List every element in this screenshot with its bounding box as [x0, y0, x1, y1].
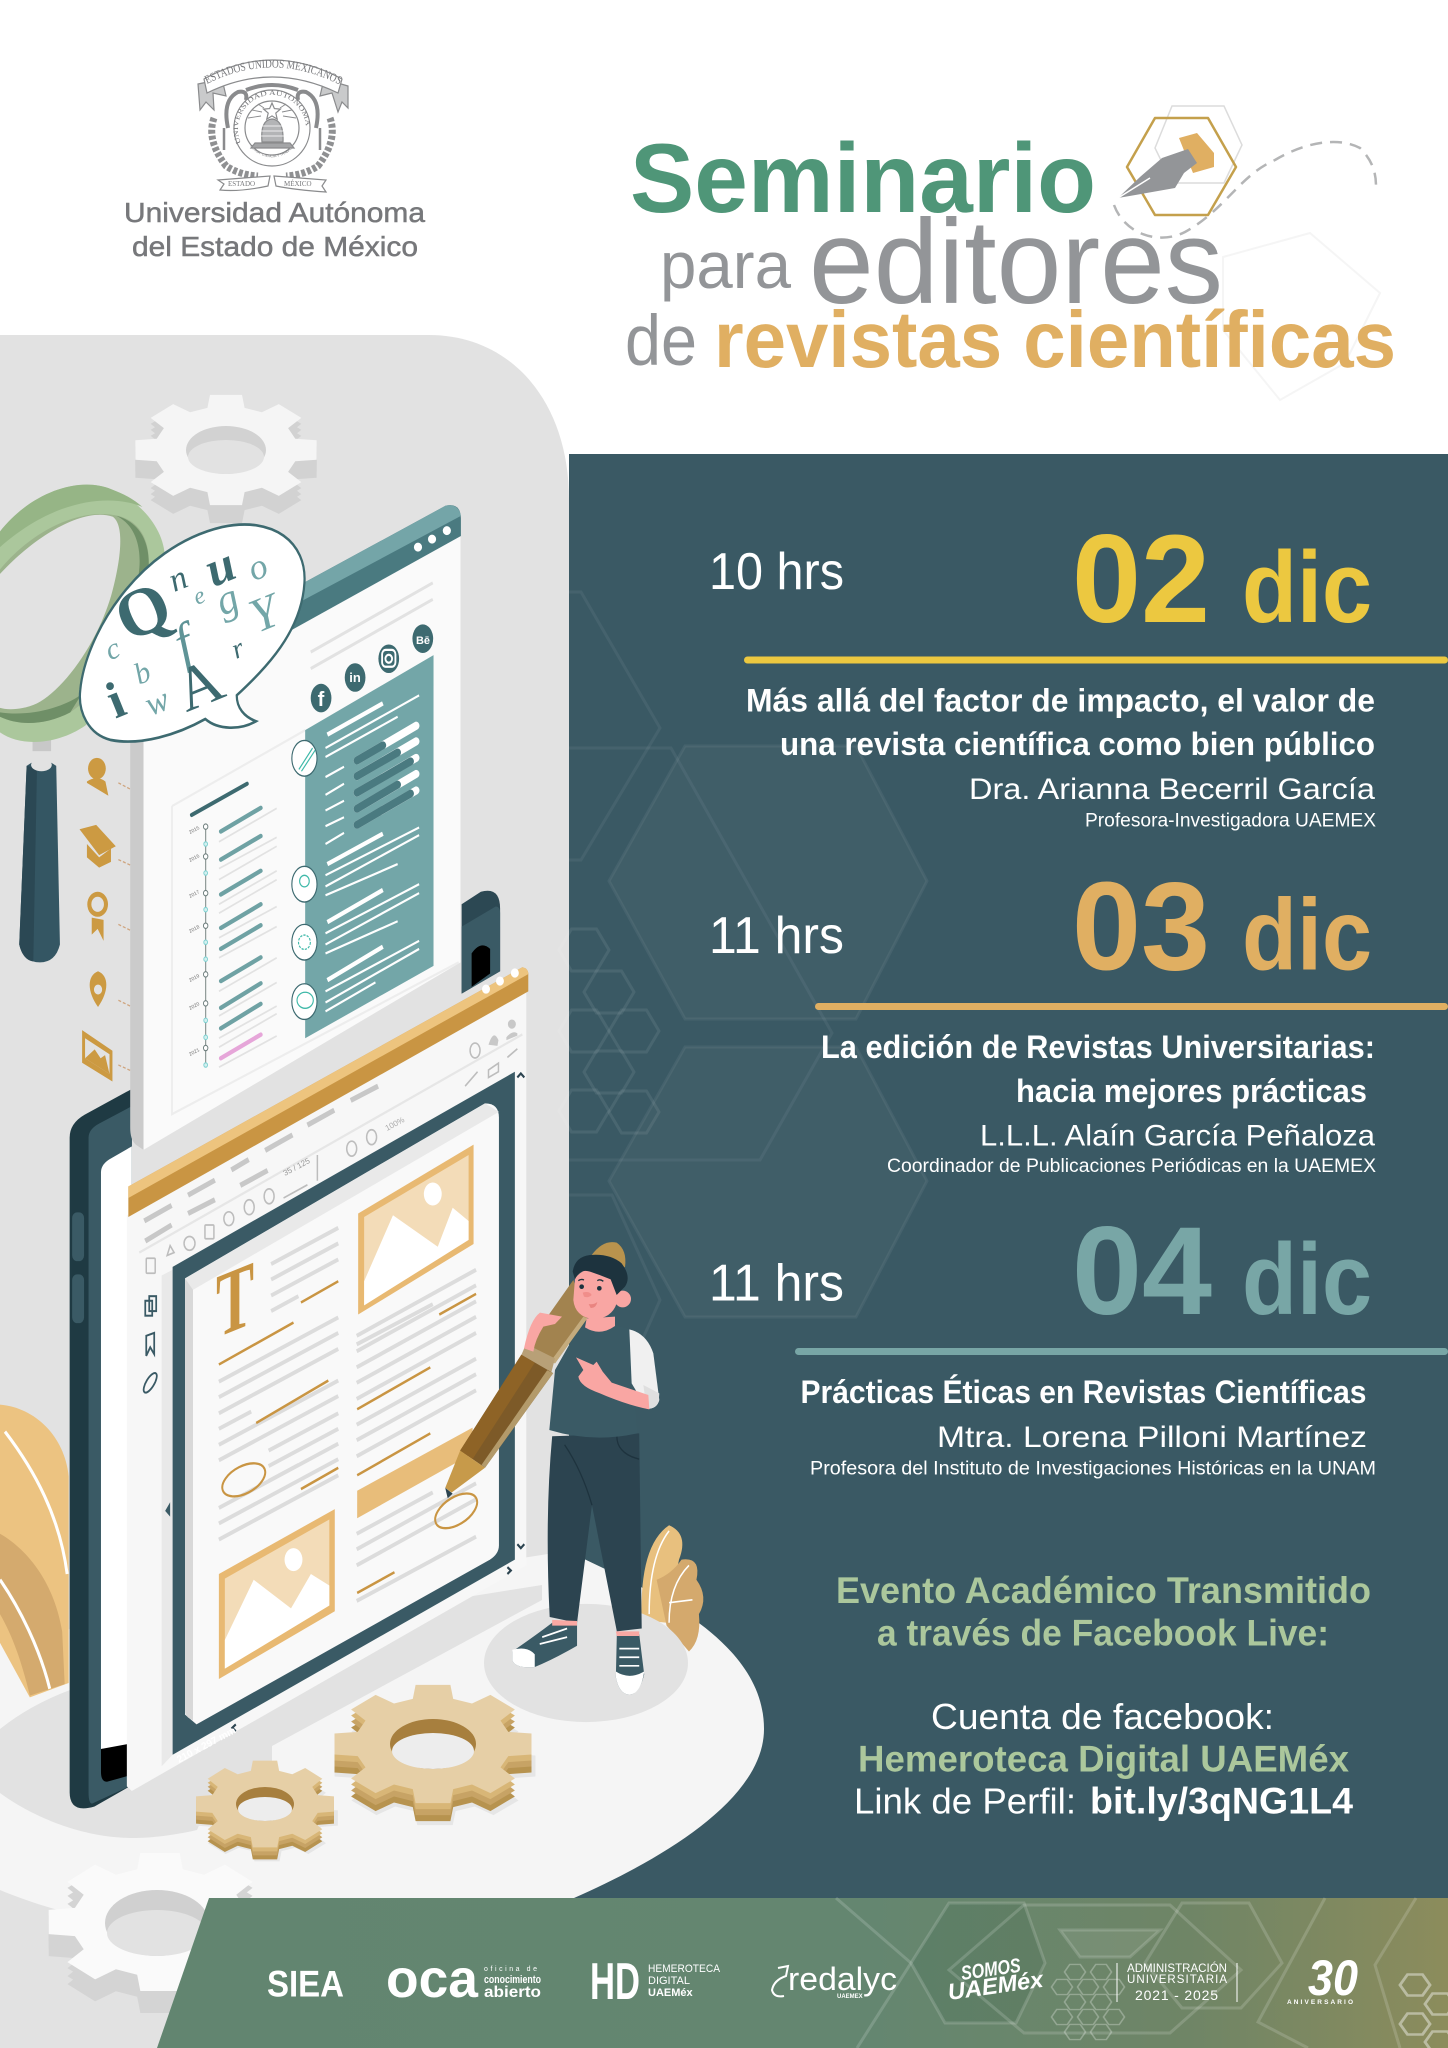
seal laurels: [212, 118, 332, 176]
illustration: article editor window: [127, 967, 528, 1791]
decoration: footer hexagon pattern: [836, 1898, 1448, 2048]
logo text: university name: [124, 197, 425, 262]
event 3 affiliation: Profesora del Instituto de Investigaciones Históricas en la UNAM: [810, 1458, 1376, 1480]
character neck: [585, 1317, 615, 1332]
icon: person: [87, 758, 108, 796]
window buttons: [482, 968, 519, 994]
toolbar: [139, 1034, 522, 1253]
gear: gold small: [196, 1761, 338, 1861]
callout: Facebook Live event: [836, 1570, 1371, 1822]
decoration: hexagon pattern in panel: [559, 592, 927, 1345]
event 3 time: 11 hrs: [709, 1254, 844, 1312]
logo: UAEM seal: [197, 59, 349, 193]
character face: [573, 1268, 617, 1319]
gear: gold large: [334, 1685, 535, 1825]
timeline years: 2019: [188, 973, 201, 984]
toolbar icons: [146, 1043, 517, 1273]
social icons: [311, 624, 433, 712]
event 2 date number: 03: [1072, 858, 1210, 996]
title line 2: editores: editores: [809, 195, 1223, 329]
page viewport: [173, 1072, 515, 1755]
event 2 time: 11 hrs: [709, 907, 844, 965]
bubble letters: u: [196, 535, 243, 597]
event 3 title: Prácticas Éticas en Revistas Científicas: [800, 1374, 1366, 1410]
plant: [642, 1525, 703, 1651]
magnifier ring: [0, 485, 165, 742]
logo text: university name: Universidad Autónoma: [124, 197, 425, 228]
event 2 speaker: L.L.L. Alaín García Peñaloza: [980, 1120, 1375, 1152]
event 2 title: La edición de Revistas Universitarias:: [821, 1029, 1375, 1065]
logo: Administración Universitaria 2021-2025: 2021 - 2025: [1135, 1987, 1218, 2003]
social icon letters: [318, 635, 430, 711]
event 2: 03 dic: hacia mejores prácticas: [1016, 1073, 1367, 1109]
image 1: [358, 1145, 474, 1315]
logo: Hemeroteca Digital UAEMéx: UAEMéx: [648, 1987, 694, 1999]
logo: oficina de conocimiento abierto: oca: [386, 1949, 479, 2009]
character shoes: [512, 1620, 644, 1695]
callout: Facebook Live event: a través de Facebook Live:: [877, 1612, 1329, 1654]
logo: Administración Universitaria 2021-2025: [1117, 1962, 1237, 2003]
illustration: left leaves: [0, 1405, 69, 1697]
logo: Hemeroteca Digital UAEMéx: HEMEROTECA: [648, 1963, 721, 1975]
page size label: 210 x 297 mm: [175, 1725, 238, 1766]
logo: oficina de conocimiento abierto: oficina de: [484, 1966, 537, 1973]
toolbar zoom label: 100%: [384, 1115, 406, 1133]
logo: redalyc: UAEMEX: [837, 1994, 863, 2000]
round icons: [292, 740, 317, 1019]
social icon letters: f: [318, 689, 325, 711]
scroll arrows: [232, 1073, 524, 1731]
skill bars: [357, 726, 416, 825]
speech bubble with letters: [80, 525, 305, 742]
logo: Somos UAEMéx: UAEMéx: [946, 1966, 1046, 2005]
footer band: [157, 1898, 1448, 2048]
callout link: bit.ly/3qNG1L4: [1090, 1780, 1353, 1822]
big letter T: T: [216, 1240, 254, 1358]
character torso: [549, 1323, 637, 1438]
window title bar: [128, 967, 528, 1217]
logo: anniversary: 30: [1308, 1950, 1358, 2006]
icon: ribbon: [87, 892, 108, 941]
logo: UAEM seal: ESTADO: [228, 180, 255, 188]
annotation ellipses: [218, 1457, 270, 1503]
highlighted band: [357, 1428, 473, 1518]
title line 1: Seminario: Seminario: [630, 123, 1096, 233]
window side: [130, 672, 144, 1150]
side toolbar icons: [141, 1296, 159, 1395]
teal panel: [305, 655, 434, 1038]
event 1 month: dic: [1242, 532, 1372, 644]
logo: Administración Universitaria 2021-2025: UNIVERSITARIA: [1127, 1974, 1227, 1986]
event 1: 02 dic: una revista científica como bien público: [780, 726, 1375, 762]
bubble letters: g: [209, 575, 245, 625]
social icon letters: in: [349, 670, 361, 685]
character features: [578, 1279, 603, 1308]
event 1 speaker: Dra. Arianna Becerril García: [969, 773, 1375, 806]
title line 2: para: para: [660, 228, 791, 302]
logo: SIEA: SIEA: [267, 1964, 344, 2004]
illustration: magnifying glass: [0, 485, 165, 962]
logo: redalyc: redalyc: [788, 1961, 897, 1997]
logo: anniversary: ANIVERSARIO: [1287, 1999, 1353, 2006]
bubble shape: [80, 525, 305, 742]
logo: Administración Universitaria 2021-2025: ADMINISTRACIÓN: [1127, 1962, 1227, 1975]
seal beehive: [262, 119, 283, 142]
character pointing arm: [576, 1357, 649, 1409]
pen collar: [521, 1344, 555, 1375]
character ear: [614, 1291, 631, 1307]
event 2 affiliation: Coordinador de Publicaciones Periódicas en la UAEMEX: [887, 1156, 1376, 1177]
event 1 title: Más allá del factor de impacto, el valor de: [746, 682, 1375, 718]
logo: oficina de conocimiento abierto: conocimiento: [484, 1974, 541, 1986]
character pants: [548, 1433, 642, 1631]
timeline heading: [192, 784, 247, 815]
panel: grey illustration backdrop: [0, 335, 569, 2048]
bubble letters: r: [227, 633, 249, 666]
magnifier handle: [19, 760, 60, 962]
teal panel text lines: [327, 703, 383, 980]
inset outline: [172, 730, 459, 1114]
pen top cap: [592, 1242, 625, 1267]
dashed connectors: [118, 783, 130, 1070]
window buttons: [414, 526, 451, 552]
callout heading: Evento Académico Transmitido: [836, 1570, 1371, 1611]
bubble letters: f: [165, 610, 208, 674]
bubble letters: b: [129, 655, 156, 691]
toolbar page counter: 35 / 125: [282, 1156, 312, 1178]
event 3 month: dic: [1242, 1224, 1372, 1336]
event 3: 04 dic: [709, 1202, 1448, 1480]
logo: anniversary: [1287, 1950, 1358, 2006]
callout account label: Cuenta de facebook:: [931, 1696, 1274, 1737]
illustration: tablet back: [70, 1089, 132, 1808]
title line 3: revistas científicas: revistas científicas: [714, 295, 1396, 384]
bubble letters: n: [163, 559, 193, 600]
seal star and rays: [264, 103, 280, 119]
bubble letters: A: [166, 645, 233, 725]
icon: fountain pen in hexagon: [1114, 106, 1376, 238]
character floor shadow: [484, 1604, 688, 1722]
icon: image: [82, 1030, 112, 1082]
event 1: 02 dic: [709, 510, 1448, 832]
logo: oficina de conocimiento abierto: abierto: [484, 1984, 541, 2001]
image 2: [219, 1509, 335, 1679]
callout link label: Link de Perfil:: [854, 1780, 1076, 1822]
bubble letters: Q: [103, 566, 182, 656]
timeline years: 2016: [188, 853, 201, 864]
logo: UAEM seal: MÉXICO: [284, 180, 312, 188]
seal bottom ribbons: [218, 176, 326, 192]
event 2: 03 dic: [709, 858, 1448, 1177]
pen barrel: [525, 1280, 587, 1363]
illustration: pen lower barrel and nib: [445, 1355, 553, 1498]
character hand on pen: [524, 1313, 562, 1352]
seal flags: [198, 79, 348, 112]
timeline years: 2015: [188, 825, 201, 836]
gear: grey top: [135, 395, 317, 523]
character sleeve: [629, 1329, 659, 1409]
seal circle: [234, 90, 310, 166]
bubble letters: i: [98, 672, 133, 730]
illustration platform: [0, 1551, 764, 1935]
logo: UAEM seal: UNIVERSIDAD AUTONOMA: [233, 90, 310, 144]
illustration: CV document window: [130, 505, 461, 1150]
event 1 date number: 02: [1072, 510, 1210, 649]
event 3 date number: 04: [1072, 1202, 1212, 1341]
illustration: tablet shadow on platform: [0, 1585, 542, 1838]
icon: map pin: [90, 971, 106, 1007]
gear: grey bottom: [49, 1853, 271, 2013]
icon: graduation cap: [80, 825, 116, 868]
timeline years: 2021: [188, 1047, 201, 1058]
timeline years: 2018: [188, 924, 201, 935]
event 2 month: dic: [1242, 880, 1372, 992]
window title bar: [144, 505, 461, 712]
bubble letters: o: [242, 545, 273, 589]
bubble letters: [98, 535, 290, 730]
timeline: [204, 826, 207, 1065]
event 3 speaker: Mtra. Lorena Pilloni Martínez: [937, 1421, 1367, 1454]
header lines: [311, 583, 433, 669]
event 2 rule: [815, 1003, 1448, 1010]
page: [185, 1103, 499, 1724]
bubble letters: e: [190, 582, 210, 611]
magnifier connector: [33, 737, 51, 751]
social icon letters: Bē: [416, 635, 430, 647]
decoration: faint background hexagon behind title: [1223, 233, 1380, 400]
character hair: [573, 1255, 628, 1295]
bubble letters: w: [140, 681, 175, 724]
seal scrolls: [226, 85, 318, 128]
title: [625, 123, 1396, 384]
timeline years: 2020: [188, 1001, 201, 1012]
logo text: university name: del Estado de México: [132, 231, 418, 262]
event 1 time: 10 hrs: [709, 543, 844, 601]
window body: [127, 991, 526, 1791]
logo: UAEM seal: PATRIA · CIENCIA Y TRABAJO: [250, 144, 294, 158]
callout account name: Hemeroteca Digital UAEMéx: [858, 1738, 1349, 1780]
event 3 rule: [795, 1348, 1448, 1355]
bubble letters: c: [100, 631, 125, 667]
timeline years: 2017: [188, 889, 201, 900]
illustration: plant, floor shadow, legs: [484, 1433, 703, 1722]
character upper body with pen barrel: [521, 1242, 659, 1438]
logo: Hemeroteca Digital UAEMéx: HD: [590, 1953, 640, 2011]
seal top band: [204, 60, 342, 93]
right toolbar icons: [488, 1020, 517, 1046]
timeline years: [188, 825, 201, 1058]
body text lines: [219, 1228, 476, 1601]
timeline entries: [219, 808, 277, 1067]
logo: Hemeroteca Digital UAEMéx: DIGITAL: [648, 1975, 690, 1987]
bubble letters: Y: [242, 582, 290, 643]
illustration: tablet top corner: [462, 891, 500, 994]
logo: UAEM seal: ESTADOS UNIDOS MEXICANOS: [204, 60, 342, 84]
logo: oficina de conocimiento abierto: [386, 1949, 541, 2009]
side column: [162, 1270, 173, 1766]
icons: orange CV icons: [80, 758, 130, 1082]
highlighted gold lines: [219, 1281, 476, 1593]
panel: schedule background: [569, 454, 1448, 1900]
title line 3: de: de: [625, 302, 697, 381]
logo: Somos UAEMéx: SOMOS: [960, 1955, 1023, 1985]
event 1 rule: [744, 656, 1448, 664]
event 1 affiliation: Profesora-Investigadora UAEMEX: [1085, 810, 1376, 832]
logo: Hemeroteca Digital UAEMéx: [590, 1953, 721, 2011]
window front: [144, 516, 461, 1150]
